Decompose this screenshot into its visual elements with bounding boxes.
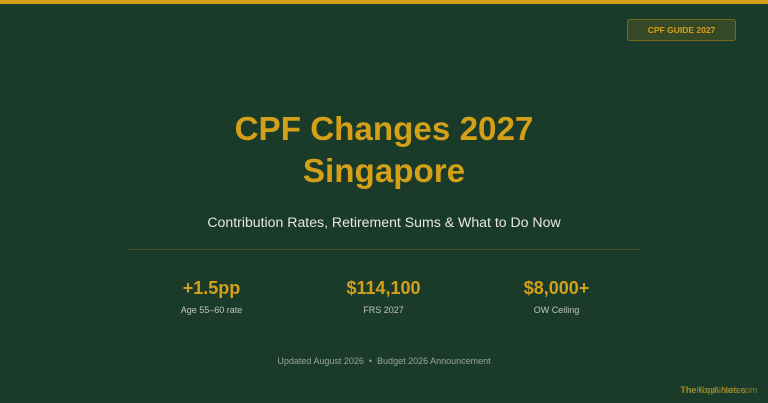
stat value: $8,000+: [524, 278, 589, 298]
stat: OW ceiling: [524, 278, 589, 315]
title: CPF Changes 2027: [235, 111, 533, 148]
stat label: FRS 2027: [363, 305, 404, 315]
stat value: $114,100: [346, 278, 421, 298]
stat value: +1.5pp: [183, 278, 240, 298]
subtitle: Contribution Rates, Retirement Sums & What to Do Now: [207, 214, 561, 230]
badge: CPF Guide 2027: [627, 19, 736, 41]
top accent bar: [0, 0, 768, 4]
title: [235, 111, 533, 190]
divider: [128, 249, 640, 250]
stat: FRS 2027: [346, 278, 421, 315]
badge: CPF Guide 2027: CPF GUIDE 2027: [648, 25, 715, 35]
stat label: OW Ceiling: [534, 305, 579, 315]
title: Singapore: [303, 153, 465, 190]
watermark: domain: TheKopiNotes.com: [681, 385, 758, 395]
update note: Updated August 2026 • Budget 2026 Announcement: [277, 356, 491, 366]
stat label: Age 55–60 rate: [181, 305, 242, 315]
stat: age 55-60 rate: [180, 278, 242, 315]
watermark: brand: The Kopi Notes: [680, 385, 746, 395]
